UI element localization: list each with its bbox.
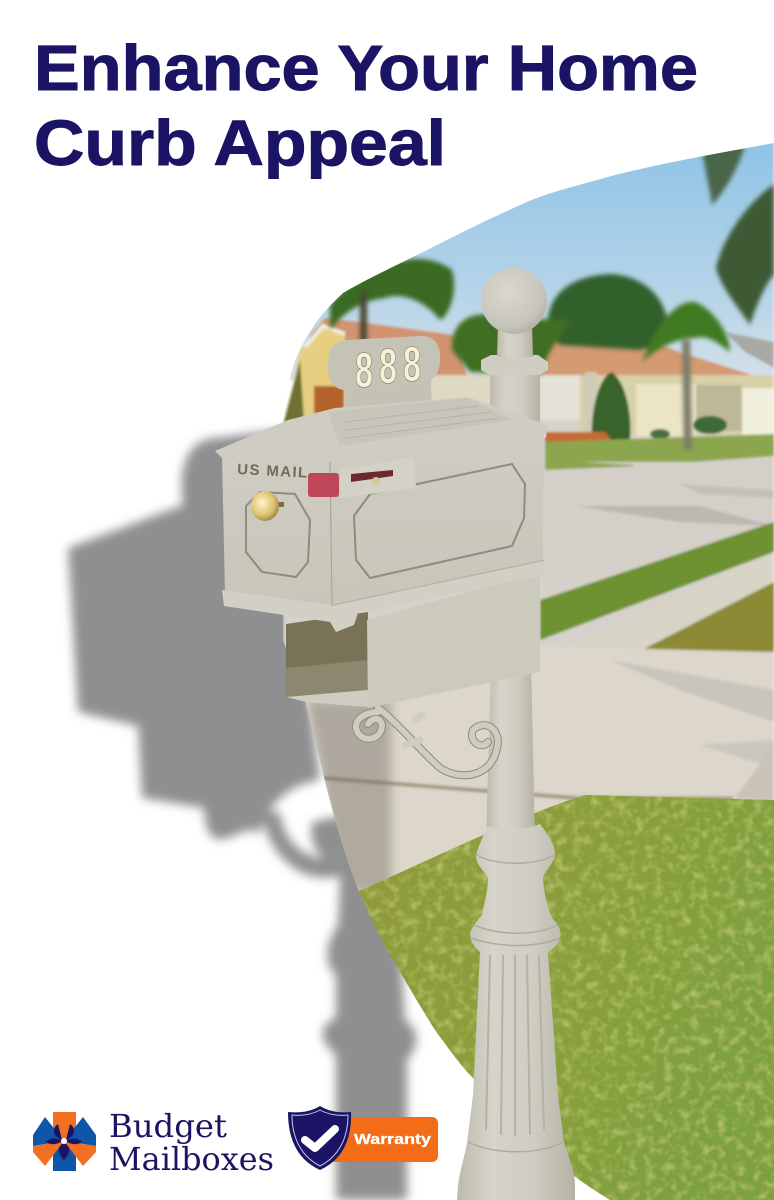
badge pill [330,1117,438,1162]
pedestal flutes [486,955,544,1136]
lower parcel box: front panel [367,572,540,708]
scroll bracket [356,708,498,775]
house roofs [310,318,470,385]
title: Curb Appeal [34,107,446,179]
logo wordmark: Budget [109,1107,227,1145]
mailbox roof [215,397,548,466]
sidewalk [565,552,774,650]
house number [355,338,421,398]
warranty label: Warranty [354,1131,432,1148]
brass door knob [251,491,284,521]
US MAIL lettering: US MAIL [237,461,308,482]
lawn light texture [350,795,774,1200]
cream houses [430,375,550,420]
side panel outline [354,464,525,578]
logo mark [33,1112,96,1171]
title [34,32,698,179]
house number plate [328,336,440,412]
small grass wedge [642,582,774,655]
shield icon [288,1106,351,1170]
ground base [283,420,774,810]
foreground lawn [350,795,774,1200]
street-side grass strip [540,522,774,640]
cast shadow of mailbox and post [68,428,417,1200]
flag slot [340,457,416,498]
title: Enhance Your Home [34,32,698,104]
red flag [308,473,339,497]
lower parcel box: dark opening [286,612,368,697]
post lower shaft [486,660,535,840]
shadow across driveway and concrete [307,700,391,892]
mailbox left door face [222,456,332,608]
door panel outline [246,492,310,577]
driveway [642,646,774,657]
bushes [592,372,630,440]
yellow house [292,328,346,416]
concrete below joint [332,808,544,902]
front palm [642,302,730,362]
flag latch [351,470,393,485]
rear palm near finial [452,315,570,375]
lawn dark texture [350,795,774,1200]
pedestal [457,824,575,1200]
street [544,454,774,476]
top right palm fronds [702,146,745,205]
logo wordmark [109,1107,274,1178]
mailbox base moulding [222,560,545,632]
upper lawn [545,434,774,462]
house number: 8 [355,344,373,398]
product: mailbox on post [215,268,575,1200]
upper post and finial [481,268,548,428]
warranty badge [288,1106,438,1170]
logo wordmark: Mailboxes [109,1140,274,1178]
house number: 8 [379,340,397,394]
background tree [548,274,668,350]
sky [280,140,774,380]
left palm tree [330,259,454,330]
logo: Budget Mailboxes [33,1107,274,1178]
mailbox side face [330,428,544,606]
photo: suburban street scene [280,140,774,1200]
house number: 8 [403,338,421,392]
